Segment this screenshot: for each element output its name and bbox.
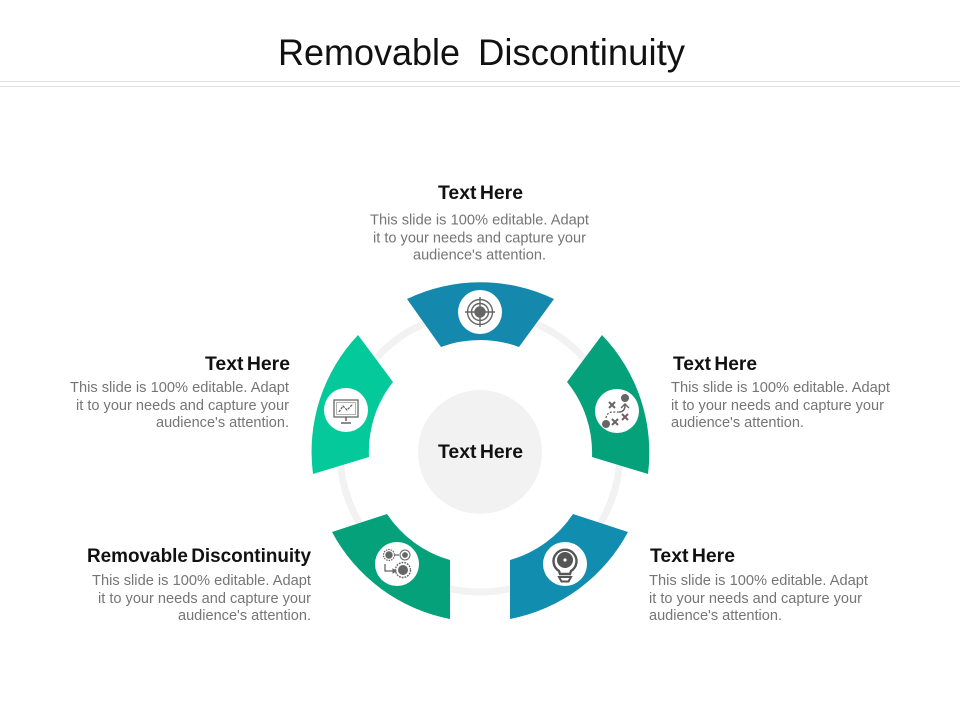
text block: top: audience's attention. [413, 248, 546, 264]
text block: lower left: it to your needs and capture your [98, 591, 311, 607]
text block: upper right: This slide is 100% editable. Adapt [671, 380, 890, 396]
text block: lower left: Removable Discontinuity [87, 545, 311, 567]
panel: upper right segment [567, 335, 649, 474]
background ring [340, 312, 620, 592]
text block: upper right: Text Here [673, 353, 757, 375]
text block: upper left [70, 353, 290, 431]
text block: top [370, 182, 589, 264]
icon: monitor with line chart [334, 400, 358, 423]
text block: upper left: This slide is 100% editable. Adapt [70, 380, 289, 396]
text block: lower left: audience's attention. [178, 608, 311, 624]
text block: lower right: audience's attention. [649, 608, 782, 624]
title [278, 31, 685, 73]
panel: top segment [407, 282, 554, 347]
text block: top: Text Here [438, 182, 523, 204]
panel: upper left segment [312, 335, 393, 474]
text block: lower right [649, 545, 868, 624]
text block: upper right [671, 353, 890, 431]
text block: upper right: it to your needs and capture your [671, 398, 884, 414]
icon: target [465, 297, 495, 327]
text block: upper left: it to your needs and capture your [76, 398, 289, 414]
icon: linked gears [384, 550, 410, 578]
center circle with label [418, 390, 542, 514]
text block: upper left: audience's attention. [156, 415, 289, 431]
center circle with label: Text Here [438, 441, 523, 463]
text block: top: This slide is 100% editable. Adapt [370, 212, 589, 228]
title: Discontinuity [478, 31, 685, 73]
text block: top: it to your needs and capture your [373, 230, 586, 246]
text block: upper left: Text Here [205, 353, 290, 375]
title: Removable [278, 31, 460, 73]
text block: lower left: This slide is 100% editable. Adapt [92, 573, 311, 589]
text block: lower left [87, 545, 311, 624]
text block: upper right: audience's attention. [671, 415, 804, 431]
panel: lower left segment [332, 514, 450, 619]
panel: lower right segment [510, 514, 628, 619]
text block: lower right: Text Here [650, 545, 735, 567]
text block: lower right: it to your needs and capture your [649, 591, 862, 607]
icon: light bulb with gear [554, 550, 576, 582]
text block: lower right: This slide is 100% editable. Adapt [649, 573, 868, 589]
icon: strategy play [603, 395, 629, 427]
